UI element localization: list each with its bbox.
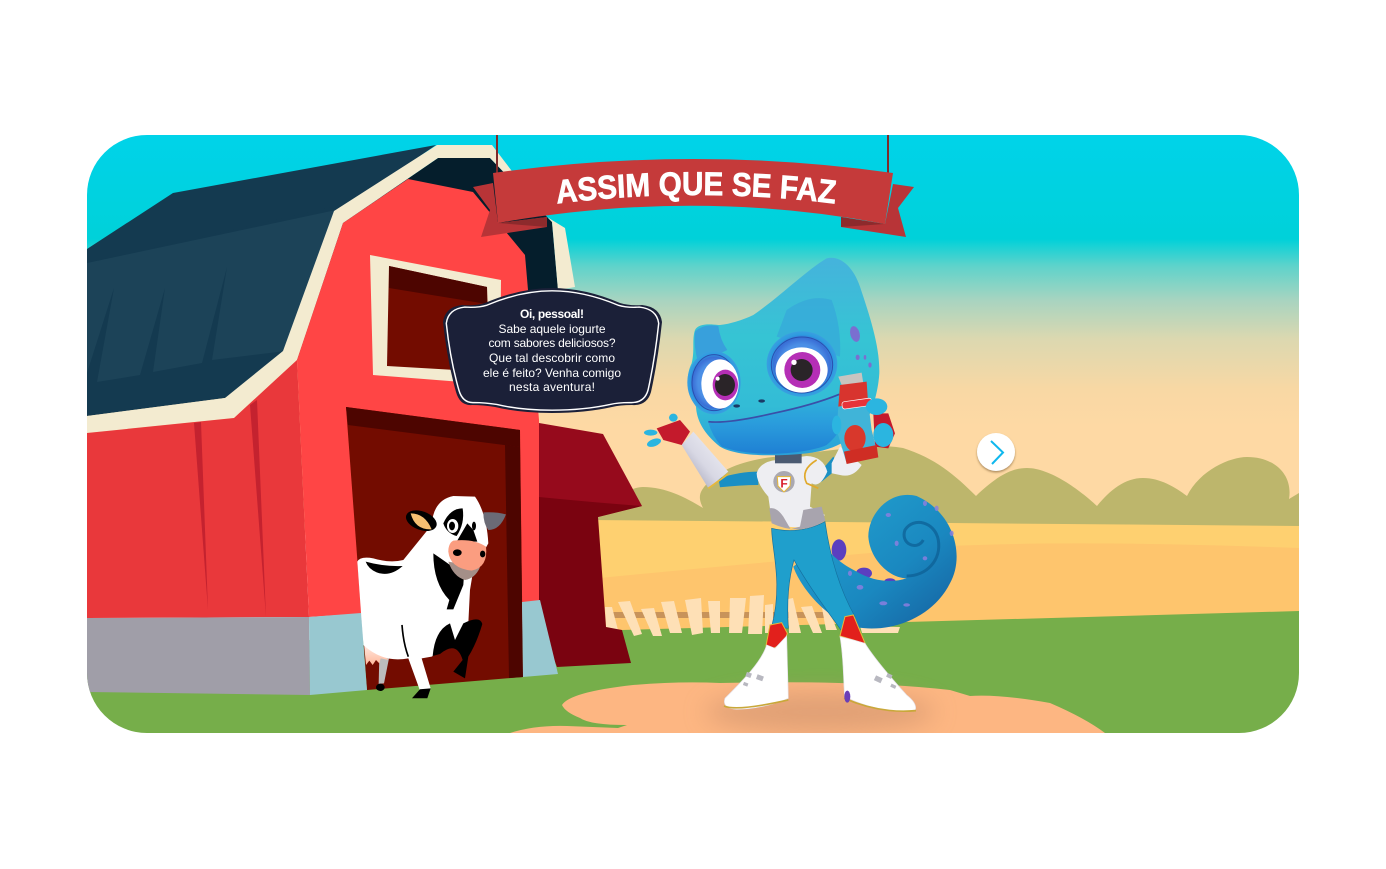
mouth line (708, 394, 839, 422)
right sleeve (832, 447, 862, 476)
cow front hoof (412, 688, 431, 698)
left sleeve (682, 432, 728, 488)
cow face blaze (457, 523, 477, 542)
window top shade (389, 266, 487, 304)
banner strings (497, 130, 888, 175)
tail spiral (904, 522, 939, 576)
bubble text: Sabe aquele iogurte (498, 322, 606, 336)
left boot panels (743, 672, 764, 687)
neck (775, 452, 802, 463)
head (688, 258, 879, 455)
yogurt bottle (837, 373, 878, 464)
cow leg line (402, 625, 408, 657)
right foundation block (522, 600, 558, 677)
barn annex upper roof (539, 423, 642, 517)
distant hills (590, 446, 1299, 530)
bubble text: Que tal descobrir como (489, 351, 615, 365)
window frame (370, 255, 501, 385)
cow neck patch (433, 553, 464, 609)
side wall grooves (194, 400, 266, 617)
banner left tail (473, 183, 547, 237)
right boot collar (840, 615, 865, 644)
torso lower grey (769, 507, 825, 529)
right boot heel light (844, 691, 850, 703)
cow (357, 496, 506, 698)
shoulder ring (805, 460, 818, 488)
fence planks (605, 595, 900, 636)
bubble shape (443, 288, 662, 413)
holding hand fingers (832, 398, 893, 447)
infographic canvas (87, 135, 1299, 733)
bottle lower band (844, 445, 878, 464)
left brow (695, 325, 727, 363)
barn side wall (87, 360, 309, 618)
tail shape (793, 495, 957, 629)
bubble text (483, 307, 621, 394)
left boot collar (766, 623, 787, 648)
left eye (687, 351, 741, 414)
bubble text: com sabores deliciosos? (488, 336, 616, 350)
tail spots (848, 501, 954, 607)
right upper arm (813, 457, 840, 482)
grey foundation (87, 617, 310, 695)
window opening (387, 266, 490, 372)
door right shade (505, 445, 523, 678)
banner (473, 135, 914, 237)
left boot sole (724, 700, 788, 708)
character ground shadow (705, 692, 935, 732)
fence rail (613, 612, 824, 618)
panel: farm scene (87, 135, 1299, 733)
cow far eye (472, 522, 476, 530)
right boot sole (844, 698, 916, 711)
right boot (840, 637, 916, 711)
cow mouth (448, 562, 480, 580)
cow udder (364, 646, 388, 665)
lower jaw (708, 394, 844, 454)
door top band (346, 407, 520, 447)
dirt path (510, 682, 1105, 733)
barn annex wall (539, 497, 642, 667)
head spots (848, 325, 872, 368)
left upper arm (718, 472, 758, 487)
bubble text: nesta aventura! (509, 380, 595, 394)
bubble inner outline (446, 291, 659, 410)
nostrils (733, 399, 765, 408)
right brow (777, 298, 840, 357)
barn (87, 145, 642, 695)
chevron icon (991, 441, 1003, 464)
cow snout (448, 540, 486, 571)
cow eye patch (443, 508, 463, 536)
bottle strawberry (844, 425, 866, 452)
banner right fold (841, 217, 885, 227)
cow eye (447, 519, 458, 533)
left sleeve cuff (708, 474, 728, 488)
bottle label top (838, 382, 868, 407)
left boot (724, 636, 788, 709)
banner left fold (498, 217, 547, 227)
roof panels (87, 210, 336, 382)
cow rear leg (376, 657, 389, 691)
sky background (87, 135, 1299, 535)
roof upper section (87, 145, 436, 270)
cow grey ear (483, 512, 506, 530)
banner main ribbon (493, 159, 893, 224)
left glove (657, 420, 690, 445)
roof lower section (87, 267, 283, 416)
holding hand back glove (873, 413, 895, 448)
torso suit (757, 456, 827, 527)
bubble text: ele é feito? Venha comigo (483, 366, 621, 380)
chameleon character (644, 258, 957, 711)
door opening (346, 407, 523, 690)
bottle body (837, 401, 878, 463)
grass (87, 611, 1299, 733)
cow left ear (403, 506, 440, 535)
cow back patch (366, 562, 403, 574)
left fingers (644, 414, 678, 449)
barn front wall (297, 179, 539, 617)
next arrow button (977, 433, 1015, 471)
cow body (357, 496, 488, 691)
fence (605, 595, 900, 636)
cream roof trim (87, 145, 575, 433)
bottle cap (838, 373, 863, 385)
cow raised black leg (433, 619, 482, 678)
title: ASSIM QUE SE FAZ (557, 172, 836, 204)
bottle logo (842, 398, 872, 409)
bubble text: Oi, pessoal! (520, 307, 584, 321)
banner right tail (841, 184, 914, 237)
speech bubble (443, 288, 662, 413)
tail (793, 495, 957, 629)
cow nostrils (453, 549, 485, 557)
right boot panels (874, 673, 896, 689)
wheat field (598, 520, 1299, 578)
wheat field lower band (602, 544, 1299, 630)
chest emblem (773, 471, 795, 492)
legs (772, 522, 855, 633)
right eye (767, 331, 837, 397)
chest emblem: F (780, 476, 788, 490)
tail spines (832, 539, 896, 584)
left foundation block (309, 613, 367, 695)
gable dark interior (297, 158, 558, 360)
